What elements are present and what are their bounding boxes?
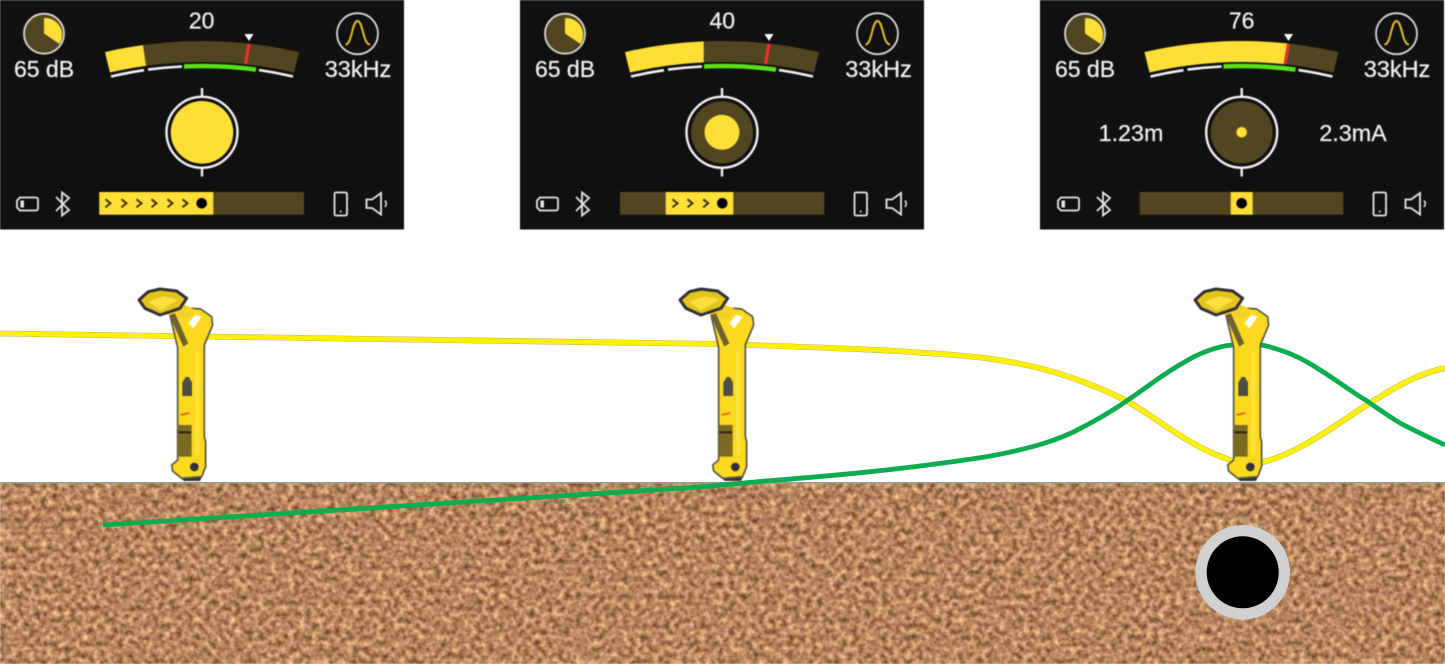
- locator device 2: [680, 289, 754, 481]
- gain label: 65 dB: [1055, 56, 1115, 82]
- locator device 1: [139, 289, 213, 481]
- panel: screen 3, signal 76: [1040, 0, 1444, 230]
- signal gauge: [105, 34, 299, 76]
- centre target: [1206, 88, 1277, 176]
- centre target: [686, 88, 758, 176]
- signal value: 40: [710, 8, 735, 34]
- signal value: 76: [1229, 8, 1254, 34]
- panel: screen 1, signal 20: [0, 0, 404, 230]
- panel: screen 2, signal 40: [520, 0, 924, 230]
- icons: battery and bluetooth: [537, 192, 589, 216]
- frequency label: 33kHz: [325, 56, 391, 82]
- icon: gain pie: [545, 14, 585, 54]
- yellow cable signal wave: [0, 334, 1445, 463]
- depth reading: 1.23m: [1099, 120, 1163, 146]
- icons: phone and speaker: [1374, 192, 1425, 216]
- centre target: [166, 88, 238, 176]
- left-right guidance bar: [620, 192, 824, 215]
- icons: battery and bluetooth: [1058, 192, 1110, 216]
- buried pipe: [1195, 525, 1290, 620]
- signal gauge: [1144, 34, 1338, 76]
- icon: frequency wave: [857, 13, 898, 54]
- left-right guidance bar: [99, 192, 304, 215]
- frequency label: 33kHz: [845, 56, 912, 82]
- icon: frequency wave: [1376, 13, 1417, 54]
- icons: phone and speaker: [334, 192, 386, 216]
- gain label: 65 dB: [14, 56, 74, 82]
- signal gauge: [625, 34, 819, 76]
- panel: ground: [0, 482, 1445, 664]
- icons: phone and speaker: [854, 192, 906, 216]
- icon: frequency wave: [337, 13, 378, 54]
- frequency label: 33kHz: [1364, 56, 1430, 82]
- green cable signal wave: [103, 344, 1445, 525]
- icon: gain pie: [1065, 14, 1105, 54]
- current reading: 2.3mA: [1319, 120, 1387, 146]
- locator device 3: [1195, 289, 1269, 481]
- gain label: 65 dB: [535, 56, 595, 82]
- signal value: 20: [189, 8, 214, 34]
- left-right guidance bar: [1140, 192, 1343, 215]
- icon: gain pie: [24, 14, 64, 54]
- icons: battery and bluetooth: [17, 192, 69, 216]
